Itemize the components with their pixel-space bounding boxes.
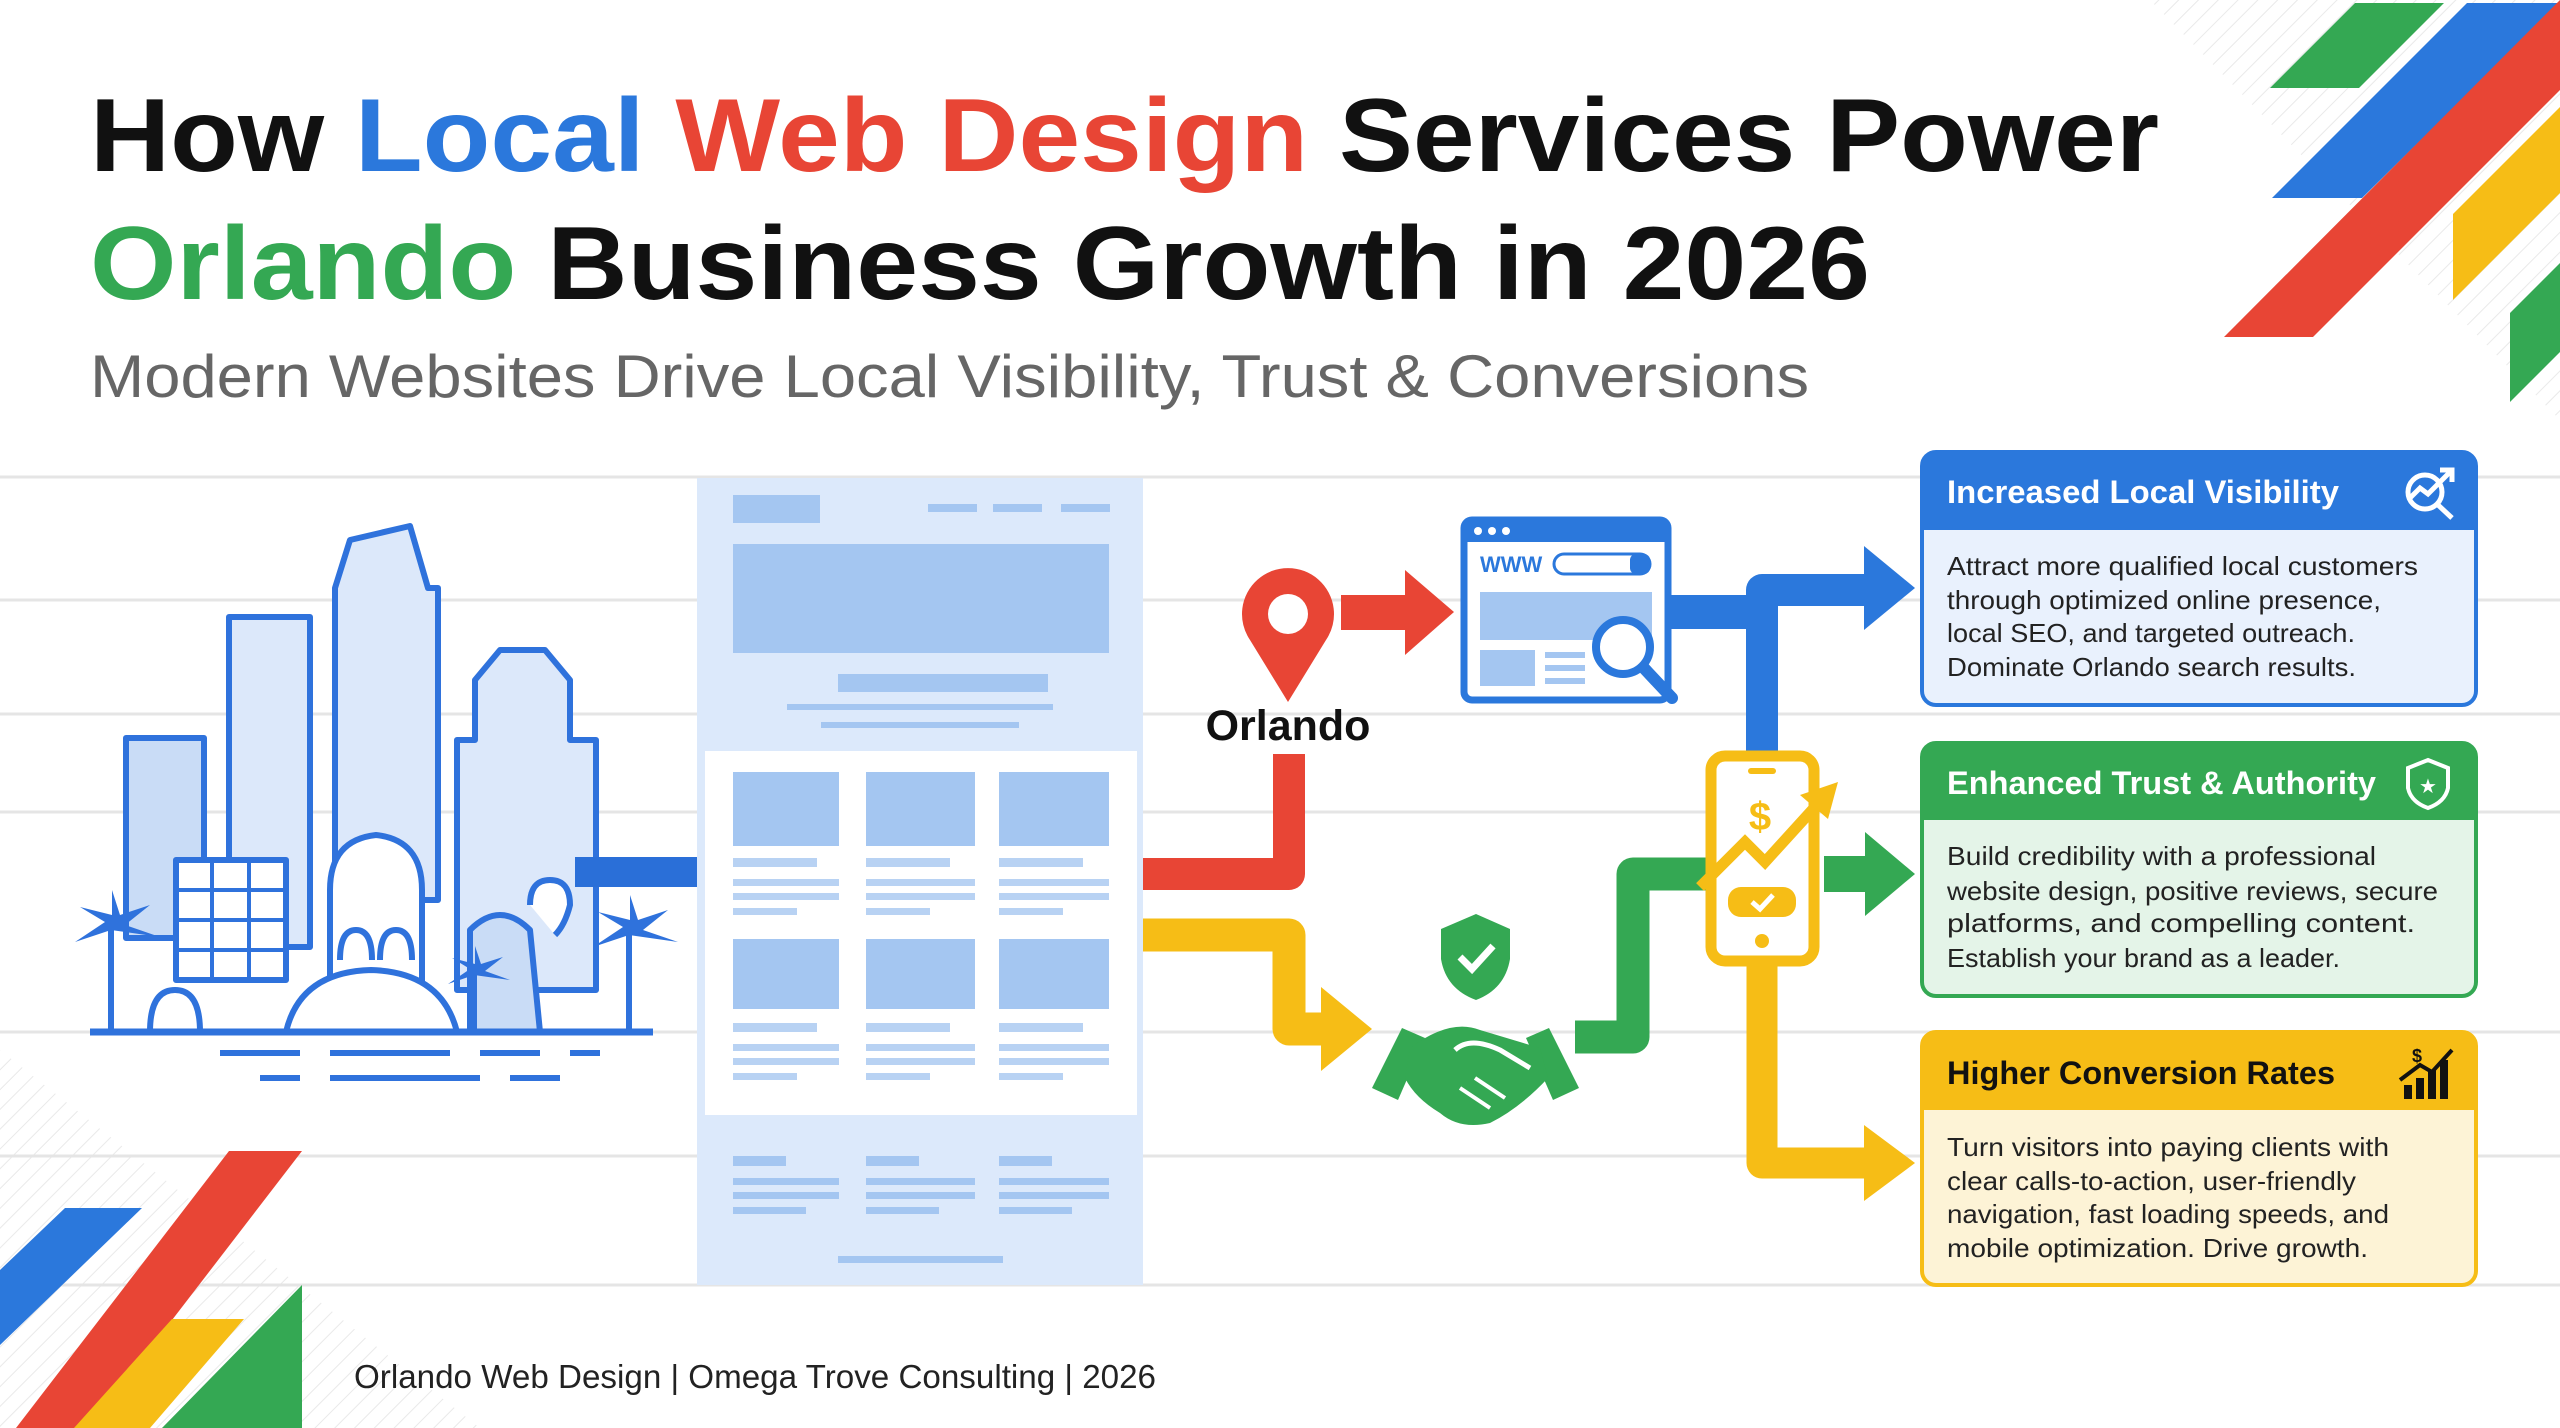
website mockup (697, 478, 1143, 1285)
card: Increased Local Visibility: local SEO, and targeted outreach. (1947, 618, 2355, 648)
card: Enhanced Trust & Authority: Build credibility with a professional (1947, 841, 2376, 871)
card: Increased Local Visibility: Attract more qualified local customers (1947, 551, 2418, 581)
card: Enhanced Trust & Authority (1922, 743, 2476, 996)
card: Enhanced Trust & Authority: platforms, and compelling content. (1947, 908, 2415, 938)
card: Increased Local Visibility: through optimized online presence, (1947, 585, 2381, 615)
icon: browser search: WWW (1480, 552, 1543, 577)
title (90, 78, 2159, 322)
card: Enhanced Trust & Authority: Enhanced Trust & Authority (1947, 765, 2376, 801)
arrow: red path to Orlando (1143, 754, 1289, 874)
card: Increased Local Visibility (1922, 452, 2476, 705)
subtitle: Modern Websites Drive Local Visibility, Trust & Conversions (90, 343, 1809, 410)
icon: search trend (2408, 470, 2452, 518)
icon: location pin (1242, 568, 1334, 702)
arrow: green to trust card (1824, 832, 1915, 916)
card: Enhanced Trust & Authority: website design, positive reviews, secure (1946, 876, 2438, 906)
title: How Local Web Design Services Power (90, 78, 2159, 194)
icon: phone with growth: $ (1749, 795, 1771, 839)
icon: growth chart: $ (2412, 1046, 2422, 1066)
icon: shield with check (1441, 914, 1510, 1000)
title: Orlando Business Growth in 2026 (90, 206, 1870, 322)
card: Higher Conversion Rates: navigation, fast loading speeds, and (1947, 1199, 2389, 1229)
card: Higher Conversion Rates: mobile optimization. Drive growth. (1947, 1233, 2368, 1263)
card: Higher Conversion Rates: clear calls-to-action, user-friendly (1947, 1166, 2356, 1196)
illustration: Orlando skyline (75, 526, 678, 1078)
arrow: blue path to visibility card (1671, 546, 1915, 760)
card: Enhanced Trust & Authority: Establish your brand as a leader. (1947, 943, 2340, 973)
icon: handshake (1372, 1027, 1579, 1125)
decoration: top-right stripes (2224, 0, 2560, 402)
footer: Orlando Web Design | Omega Trove Consulting | 2026 (354, 1358, 1156, 1395)
decoration: bottom-left stripes (0, 1151, 302, 1428)
label: Orlando: Orlando (1206, 702, 1370, 750)
card: Higher Conversion Rates: Turn visitors into paying clients with (1947, 1132, 2389, 1162)
arrow: yellow path to handshake (1143, 935, 1372, 1071)
card: Increased Local Visibility: Increased Local Visibility (1947, 474, 2339, 510)
arrow: green path to phone (1575, 874, 1712, 1037)
card: Higher Conversion Rates: Higher Conversion Rates (1947, 1055, 2335, 1091)
connector: city to website (575, 857, 697, 887)
arrow: yellow to conversion card (1762, 966, 1915, 1201)
arrow: pin to browser (1341, 570, 1454, 655)
icon: phone with growth (1700, 756, 1838, 961)
card: Increased Local Visibility: Dominate Orlando search results. (1947, 652, 2356, 682)
icon: badge: ★ (2419, 776, 2437, 798)
icon: browser search (1464, 520, 1672, 700)
icon: badge (2408, 760, 2448, 808)
card: Higher Conversion Rates (1922, 1032, 2476, 1285)
icon: growth chart (2400, 1046, 2452, 1099)
